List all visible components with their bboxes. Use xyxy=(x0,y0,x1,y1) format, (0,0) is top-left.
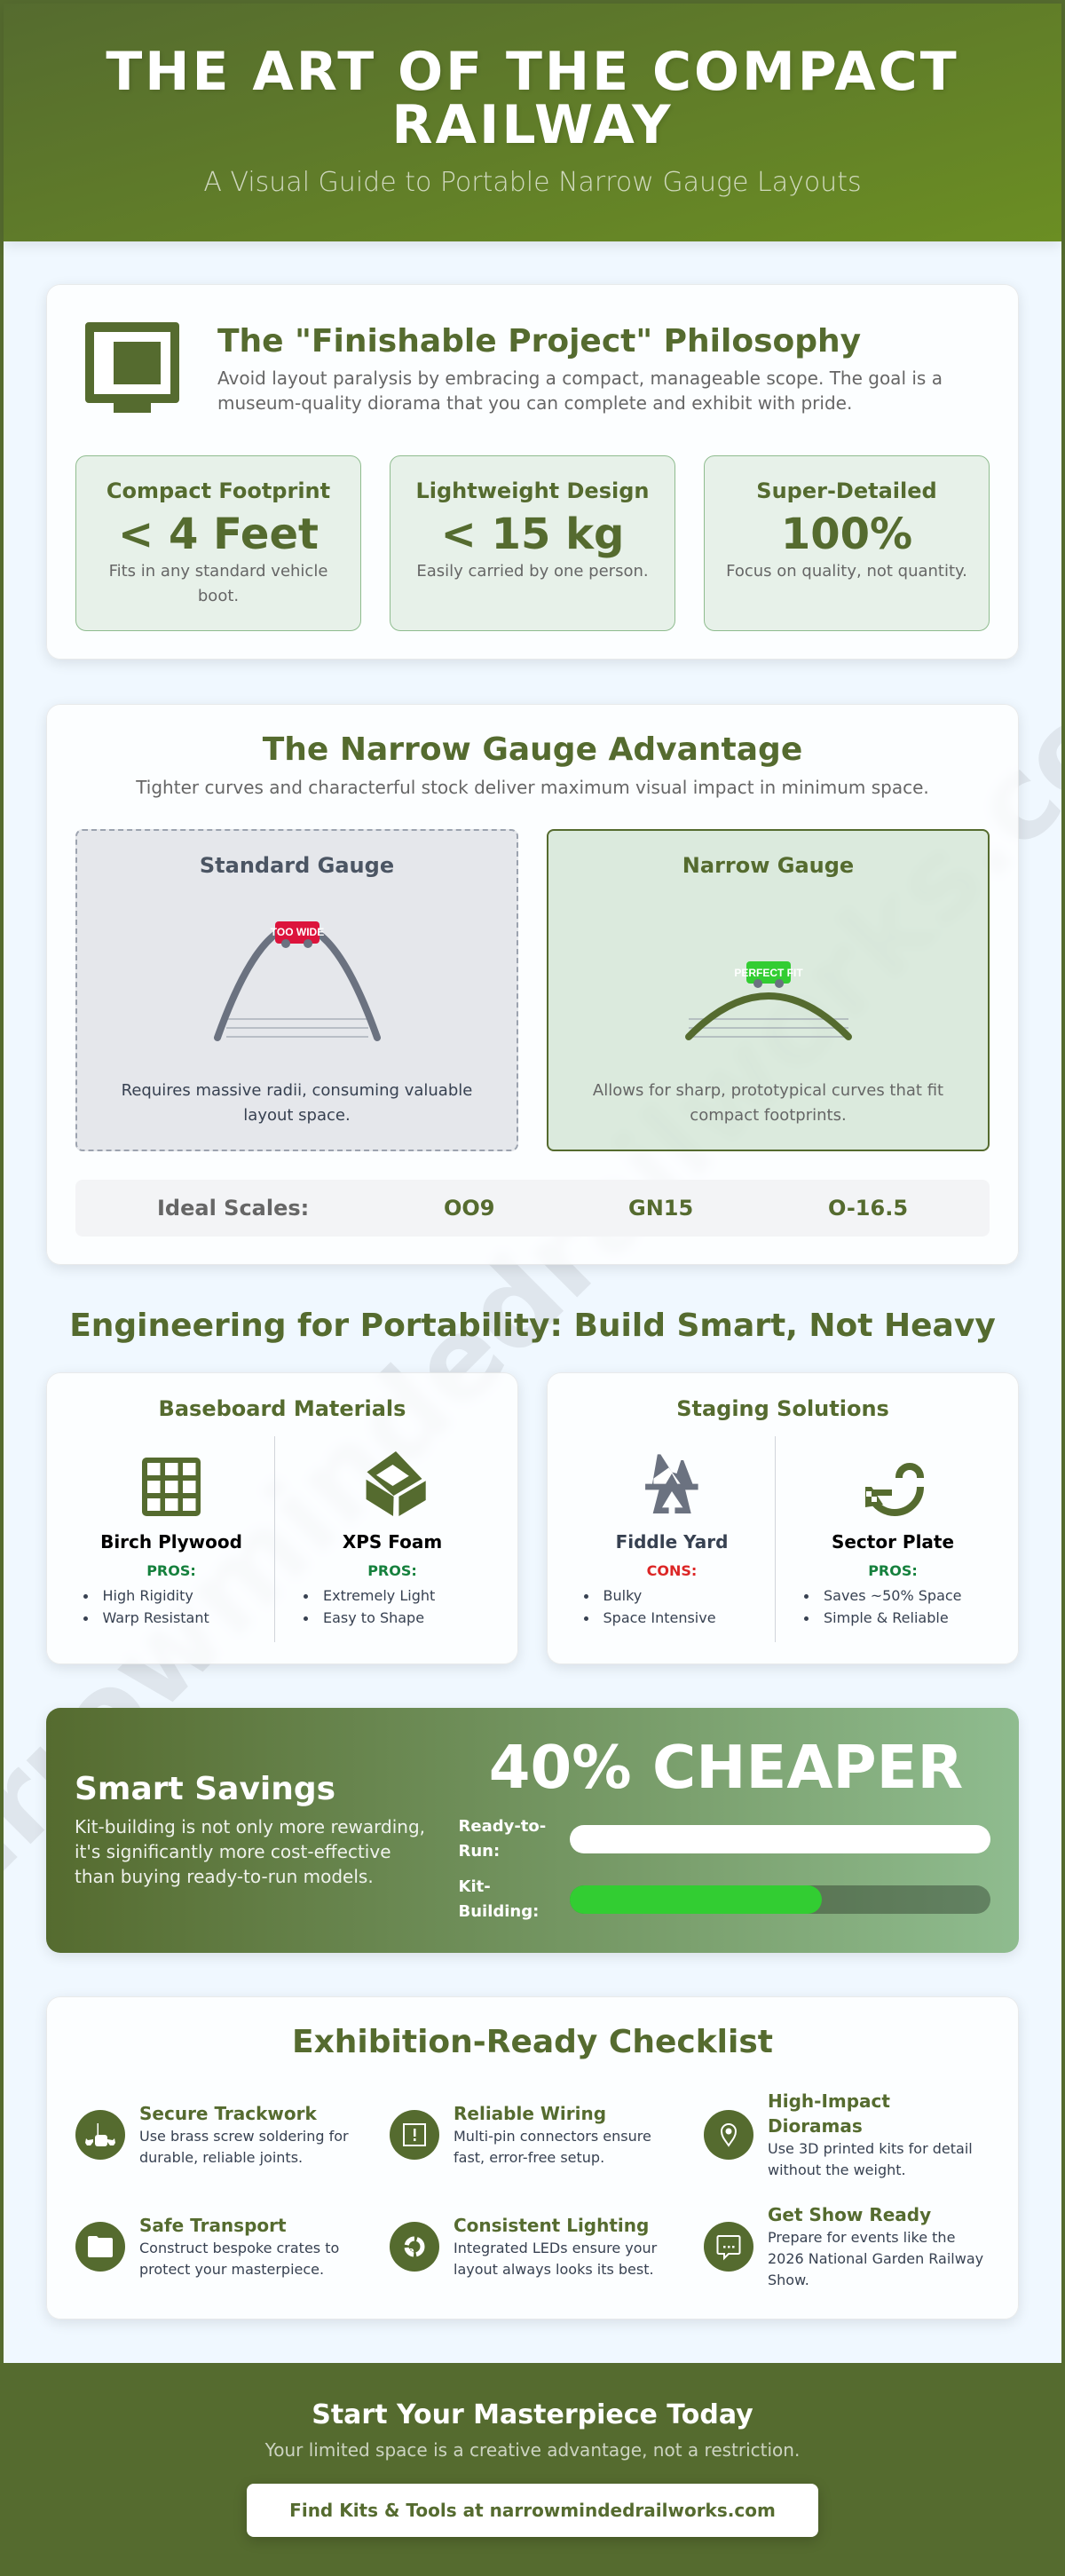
standard gauge title: Standard Gauge xyxy=(200,853,394,878)
description: Multi-pin connectors ensure xyxy=(454,2128,651,2145)
bar label: ready-to-run xyxy=(458,1817,546,1861)
icon: crate xyxy=(75,2222,125,2272)
pros list: Saves ~50% Space xyxy=(824,1587,962,1604)
narrow gauge description: Allows for sharp, prototypical curves that fit xyxy=(593,1081,943,1100)
big number: 40% cheaper: 40% CHEAPER xyxy=(489,1733,963,1802)
scales label: Ideal Scales: xyxy=(157,1196,309,1221)
title: THE ART OF THE COMPACT xyxy=(106,41,959,103)
material: birch plywood xyxy=(83,1458,242,1626)
description xyxy=(139,2239,339,2278)
description: Integrated LEDs ensure your xyxy=(454,2239,657,2256)
narrow gauge title: Narrow Gauge xyxy=(682,853,854,878)
pros list: Easy to Shape xyxy=(323,1608,424,1626)
pros label: PROS: xyxy=(367,1562,417,1579)
panel: smart savings xyxy=(46,1708,1019,1953)
bar label: ready-to-run: Ready-to- xyxy=(458,1817,546,1836)
column divider xyxy=(775,1436,776,1642)
title: RAILWAY xyxy=(391,94,674,156)
pros list xyxy=(83,1587,209,1626)
material: xps foam xyxy=(304,1451,442,1626)
intro text: Avoid layout paralysis by embracing a compact, manageable scope. The goal is a xyxy=(217,367,943,389)
checklist: high-impact dioramas xyxy=(704,2090,973,2178)
stat: super-detailed: 100% xyxy=(781,510,912,559)
panel: baseboard materials xyxy=(46,1372,518,1664)
checklist: reliable wiring xyxy=(390,2103,651,2166)
baseboard title: Baseboard Materials xyxy=(159,1396,406,1421)
bar label: kit-building: Kit- xyxy=(458,1877,491,1896)
intro text xyxy=(217,367,943,414)
description: protect your masterpiece. xyxy=(139,2261,324,2278)
checklist: secure trackwork xyxy=(75,2103,349,2166)
pros label: PROS: xyxy=(868,1562,918,1579)
icon: chat bubble xyxy=(704,2222,753,2272)
bar: kit-building xyxy=(570,1885,990,1914)
description: Construct bespoke crates to xyxy=(139,2239,339,2256)
bar fill 60% xyxy=(570,1885,822,1914)
diagram: wide curve with car: TOO WIDE xyxy=(271,926,324,938)
comparison: standard gauge xyxy=(75,829,518,1151)
stat: compact footprint: boot. xyxy=(198,587,239,605)
description: Prepare for events like the xyxy=(768,2229,955,2246)
title xyxy=(106,41,959,156)
checklist: safe transport xyxy=(75,2215,339,2278)
icon: lighting xyxy=(390,2222,439,2272)
icon: lighting: e xyxy=(407,2245,414,2256)
column divider xyxy=(274,1436,275,1642)
savings heading: Smart Savings xyxy=(75,1771,335,1807)
bar: ready-to-run xyxy=(570,1825,990,1853)
scale: O-16.5: O-16.5 xyxy=(828,1196,908,1221)
cons list: Space Intensive xyxy=(604,1608,716,1626)
stat: compact footprint: Fits in any standard vehicle xyxy=(109,562,327,581)
bar label: kit-building xyxy=(458,1877,539,1921)
pros label: PROS: xyxy=(146,1562,196,1579)
icon: connector box xyxy=(390,2110,439,2160)
footer xyxy=(0,2363,1065,2576)
stat: lightweight design: < 15 kg xyxy=(441,510,624,559)
stat: compact footprint xyxy=(75,455,361,631)
heading: The Narrow Gauge Advantage xyxy=(263,731,802,768)
savings text: Kit-building is not only more rewarding, xyxy=(75,1816,425,1837)
solution: fiddle yard xyxy=(584,1454,728,1626)
standard gauge description: layout space. xyxy=(243,1106,351,1125)
footer tagline: Your limited space is a creative advantage, not a restriction. xyxy=(265,2439,800,2461)
pros list xyxy=(804,1587,962,1626)
panel: finishable project philosophy xyxy=(46,284,1019,660)
narrow gauge description: compact footprints. xyxy=(690,1106,847,1125)
stat: super-detailed: Focus on quality, not quantity. xyxy=(726,562,967,581)
subtitle: A Visual Guide to Portable Narrow Gauge Layouts xyxy=(203,167,862,198)
description: Show. xyxy=(768,2272,809,2288)
icon: foam block xyxy=(366,1451,426,1516)
icon: plywood grid xyxy=(142,1458,201,1516)
description: durable, reliable joints. xyxy=(139,2149,303,2166)
stat: super-detailed: Super-Detailed xyxy=(756,478,937,503)
icon: fiddle yard xyxy=(645,1454,698,1513)
heading: Exhibition-Ready Checklist xyxy=(292,2024,773,2060)
stat: super-detailed xyxy=(704,455,990,631)
description xyxy=(454,2128,651,2166)
checklist: get show ready xyxy=(704,2204,983,2288)
panel: staging solutions xyxy=(547,1372,1019,1664)
narrow gauge description xyxy=(593,1081,943,1125)
cons list: Bulky xyxy=(604,1587,642,1604)
standard gauge description xyxy=(122,1081,472,1125)
call-to-action button xyxy=(247,2484,818,2537)
description xyxy=(454,2239,657,2278)
icon: sector plate xyxy=(865,1463,924,1516)
pros list: Extremely Light xyxy=(323,1587,435,1604)
heading: The "Finishable Project" Philosophy xyxy=(217,323,861,360)
stat: lightweight design: Easily carried by one person. xyxy=(416,562,649,581)
staging title: Staging Solutions xyxy=(676,1396,889,1421)
bar label: ready-to-run: Run: xyxy=(458,1842,500,1861)
pros list: Warp Resistant xyxy=(103,1608,209,1626)
description: 2026 National Garden Railway xyxy=(768,2250,983,2267)
subheading: Tighter curves and characterful stock deliver maximum visual impact in minimum space. xyxy=(136,777,929,798)
description xyxy=(768,2229,983,2288)
stat: lightweight design: Lightweight Design xyxy=(415,478,650,503)
stat: lightweight design xyxy=(390,455,675,631)
diagram: tight curve with car xyxy=(685,961,852,1040)
title: Dioramas xyxy=(768,2115,863,2137)
ideal scales bar xyxy=(75,1180,990,1237)
pros list xyxy=(304,1587,435,1626)
diagram: tight curve with car: PERFECT FIT xyxy=(734,967,803,979)
diagram: wide curve with car xyxy=(214,921,381,1041)
icon: display frame xyxy=(85,322,179,413)
stat: compact footprint: Compact Footprint xyxy=(106,478,330,503)
stat: compact footprint: < 4 Feet xyxy=(118,510,319,559)
icon: map pin xyxy=(704,2110,753,2160)
sector plate name: Sector Plate xyxy=(832,1531,954,1553)
footer heading: Start Your Masterpiece Today xyxy=(312,2399,753,2430)
savings text: it's significantly more cost-effective xyxy=(75,1841,390,1862)
checklist: consistent lighting xyxy=(390,2215,657,2278)
call-to-action button: Find Kits & Tools at narrowmindedrailworks.com xyxy=(289,2500,776,2521)
savings text: than buying ready-to-run models. xyxy=(75,1866,374,1887)
cons label: CONS: xyxy=(647,1562,697,1579)
panel: narrow gauge advantage xyxy=(46,704,1019,1265)
scale: GN15: GN15 xyxy=(628,1196,693,1221)
description xyxy=(768,2140,973,2178)
description xyxy=(139,2128,349,2166)
description: without the weight. xyxy=(768,2161,906,2178)
standard gauge description: Requires massive radii, consuming valuable xyxy=(122,1081,472,1100)
panel: exhibition-ready checklist xyxy=(46,1996,1019,2319)
title: Consistent Lighting xyxy=(454,2215,649,2236)
icon: soldering xyxy=(75,2110,125,2160)
header banner xyxy=(4,4,1061,241)
xps foam name: XPS Foam xyxy=(343,1531,442,1553)
pros list: Simple & Reliable xyxy=(824,1608,949,1626)
solution: sector plate xyxy=(804,1463,962,1626)
section heading: engineering: Engineering for Portability: Build Smart, Not Heavy xyxy=(69,1308,996,1344)
title: Secure Trackwork xyxy=(139,2103,317,2124)
title: Safe Transport xyxy=(139,2215,287,2236)
comparison: narrow gauge xyxy=(547,829,990,1151)
description: Use brass screw soldering for xyxy=(139,2128,349,2145)
title xyxy=(768,2090,890,2137)
title: Reliable Wiring xyxy=(454,2103,606,2124)
birch plywood name: Birch Plywood xyxy=(100,1531,242,1553)
title: Get Show Ready xyxy=(768,2204,931,2225)
cons list xyxy=(584,1587,716,1626)
description: Use 3D printed kits for detail xyxy=(768,2140,973,2157)
fiddle yard name: Fiddle Yard xyxy=(616,1531,728,1553)
description: layout always looks its best. xyxy=(454,2261,654,2278)
pros list: High Rigidity xyxy=(103,1587,193,1604)
title: High-Impact xyxy=(768,2090,890,2112)
bar label: kit-building: Building: xyxy=(458,1902,539,1921)
scale: OO9: OO9 xyxy=(444,1196,495,1221)
description: fast, error-free setup. xyxy=(454,2149,604,2166)
savings text xyxy=(75,1816,425,1887)
intro text: museum-quality diorama that you can complete and exhibit with pride. xyxy=(217,392,852,414)
